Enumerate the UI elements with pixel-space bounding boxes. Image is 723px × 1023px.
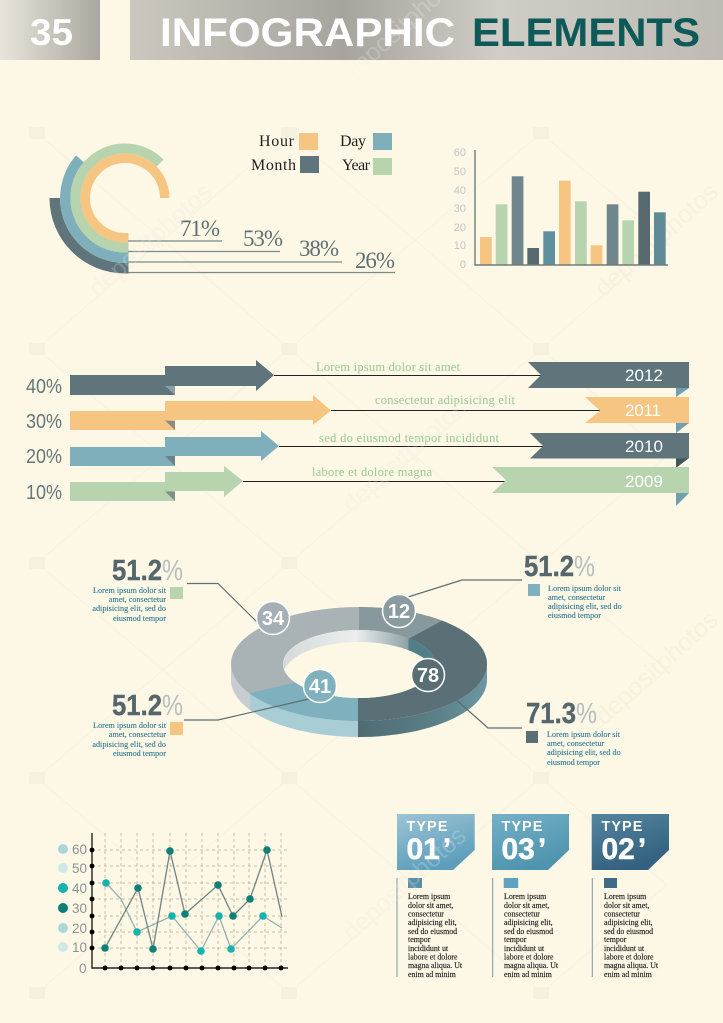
header: number tab: 35 xyxy=(30,12,73,53)
watermark lattice xyxy=(29,127,667,999)
callout: bottom left: amet, consectetur xyxy=(109,730,166,739)
type card 01: enim ad minim xyxy=(408,970,457,979)
callout: bottom left: eiusmod tempor xyxy=(113,749,166,758)
type card 02: tempor xyxy=(604,935,627,944)
axes xyxy=(475,150,668,265)
arrow 2010 xyxy=(70,431,279,466)
legend: Year xyxy=(342,157,371,174)
y labels: 40 xyxy=(72,881,87,896)
ribbon 2010: 2010 xyxy=(625,437,663,456)
percentage labels: 53% xyxy=(243,226,283,251)
row labels: percent: 40% xyxy=(26,376,62,398)
series light xyxy=(102,879,282,955)
watermark overlay xyxy=(83,0,472,946)
callout: top left xyxy=(92,555,183,623)
type card 03: magna aliqua. Ut xyxy=(504,961,559,970)
axis labels: 60 xyxy=(454,147,466,159)
percentage labels: 38% xyxy=(299,236,339,261)
ribbon 2009 xyxy=(492,467,689,506)
row labels: percent: 30% xyxy=(26,411,62,433)
watermark overlay: depositphotos xyxy=(83,177,218,302)
callout: bottom right: Lorem ipsum dolor sit xyxy=(547,730,621,739)
callout: top right: eiusmod tempor xyxy=(548,611,601,620)
type card 02: 02’ xyxy=(602,833,646,866)
type card 02: labore et dolore xyxy=(604,952,654,962)
donut side xyxy=(231,664,487,737)
3D donut chart xyxy=(184,580,522,740)
callout: top left: Lorem ipsum dolor sit xyxy=(93,586,167,595)
type card 02: adipisicing elit, xyxy=(604,918,653,927)
caption 3: sed do eiusmod tempor incididunt xyxy=(319,431,500,445)
watermark text: depositphotos xyxy=(589,605,723,730)
type card 03: incididunt ut xyxy=(504,944,545,953)
watermark overlay: depositphotos xyxy=(337,821,472,946)
callout: bottom right: adipisicing elit, sed do xyxy=(547,748,621,757)
type card 03: 03’ xyxy=(502,833,546,866)
ring: hour xyxy=(80,154,170,242)
marker 12 xyxy=(382,594,416,628)
callout: bottom left: Lorem ipsum dolor sit xyxy=(93,721,167,730)
y labels: 20 xyxy=(72,921,87,936)
legend: Day xyxy=(340,133,366,150)
marker 12: 12 xyxy=(388,601,410,623)
ring: year xyxy=(70,144,164,253)
callout: top right: 51.2 xyxy=(524,551,574,583)
type card 02: TYPE xyxy=(602,819,643,835)
percentage labels: 26% xyxy=(355,248,395,273)
type card 01: labore et dolore xyxy=(408,952,458,962)
callout: bottom left xyxy=(92,690,183,758)
callout: bottom right: amet, consectetur xyxy=(547,739,605,748)
watermark text: depositphotos xyxy=(337,821,472,946)
type card 01: sed do eiusmod xyxy=(408,927,457,936)
watermark text: depositphotos xyxy=(589,177,723,302)
type card 03: Lorem ipsum xyxy=(504,892,547,901)
callout: top left: adipisicing elit, sed do xyxy=(92,604,166,613)
series dark xyxy=(101,846,282,953)
marker 41 xyxy=(304,670,336,702)
axis labels: 40 xyxy=(454,185,466,197)
donut inner wall xyxy=(283,630,435,698)
donut top face xyxy=(231,607,487,721)
callout: bottom right xyxy=(526,698,621,767)
callout: top right xyxy=(524,551,622,620)
callout: top right: amet, consectetur xyxy=(548,593,606,602)
callout: bottom left: % xyxy=(162,690,183,722)
watermark text: depositphotos xyxy=(337,393,472,518)
type card 03: labore et dolore xyxy=(504,952,554,962)
type card 01: dolor sit amet, xyxy=(408,901,453,910)
ribbon 2012: 2012 xyxy=(625,366,663,385)
type card 01: incididunt ut xyxy=(408,944,449,953)
percentage labels xyxy=(180,216,395,273)
ribbon 2010 xyxy=(530,433,689,468)
type card 01: Lorem ipsum xyxy=(408,892,451,901)
marker 34: 34 xyxy=(262,608,285,630)
type card 03: sed do eiusmod xyxy=(504,927,553,936)
callout: bottom right: eiusmod tempor xyxy=(547,758,600,767)
axis labels xyxy=(454,147,466,271)
grid xyxy=(92,833,290,968)
type card 02: incididunt ut xyxy=(604,944,645,953)
watermark text: depositphotos xyxy=(83,177,218,302)
type card 02: dolor sit amet, xyxy=(604,901,649,910)
ribbon 2009: 2009 xyxy=(625,472,663,491)
type card 01: tempor xyxy=(408,935,431,944)
type card 01: magna aliqua. Ut xyxy=(408,961,463,970)
legend: Hour xyxy=(259,133,295,150)
marker 78 xyxy=(412,658,444,692)
axis labels: 30 xyxy=(454,203,466,215)
legend xyxy=(251,133,392,175)
ribbon 2011: 2011 xyxy=(625,401,661,420)
type card 01: TYPE xyxy=(406,819,448,835)
arrow 2009 xyxy=(70,466,243,501)
axis labels: 10 xyxy=(454,240,466,252)
type card 01: adipisicing elit, xyxy=(408,918,457,927)
axis labels: 0 xyxy=(460,259,466,271)
ribbon 2012 xyxy=(528,362,689,397)
callout: top right: % xyxy=(574,551,595,583)
radial bar chart xyxy=(50,144,395,274)
marker 34 xyxy=(256,602,290,634)
callout: top left: % xyxy=(162,555,183,587)
legend dots xyxy=(58,844,68,952)
axes xyxy=(92,833,288,968)
header: number tab xyxy=(0,0,100,60)
type card 01: consectetur xyxy=(408,910,444,918)
callout: top right: Lorem ipsum dolor sit xyxy=(548,584,622,593)
type card 03: dolor sit amet, xyxy=(504,901,549,910)
y labels: 10 xyxy=(72,940,87,955)
row labels: percent xyxy=(26,376,62,504)
y labels: 50 xyxy=(72,861,87,876)
callout: bottom left: 51.2 xyxy=(112,690,162,722)
type card 02: sed do eiusmod xyxy=(604,927,653,936)
type card 01 xyxy=(397,814,475,979)
ribbon 2011 xyxy=(585,397,689,433)
bars xyxy=(480,176,666,265)
marker 78: 78 xyxy=(417,665,439,687)
y labels: 0 xyxy=(79,961,87,976)
ring: day xyxy=(60,155,128,263)
arrow 2011 xyxy=(70,395,331,430)
header: title banner xyxy=(130,0,723,60)
axis labels: 50 xyxy=(454,166,466,178)
type card 03 xyxy=(492,814,569,979)
percentage labels: 71% xyxy=(180,216,220,241)
axis labels: 20 xyxy=(454,222,466,234)
arrow 2012 xyxy=(70,360,274,395)
callout: top left: 51.2 xyxy=(112,555,162,587)
arrow timeline xyxy=(70,360,689,506)
header: title banner: ELEMENTS xyxy=(472,11,700,55)
callout: bottom right: % xyxy=(576,698,597,730)
caption 2: consectetur adipisicing elit xyxy=(375,393,516,407)
callout: top left: eiusmod tempor xyxy=(113,614,166,623)
legend: Month xyxy=(251,157,296,174)
line chart xyxy=(58,833,290,976)
type card 02 xyxy=(592,814,669,979)
caption 4: labore et dolore magna xyxy=(312,465,432,479)
ring: month xyxy=(50,198,128,274)
connector lines xyxy=(184,580,522,728)
row labels: percent: 20% xyxy=(26,446,62,468)
y labels: 60 xyxy=(72,842,87,857)
connector lines xyxy=(243,376,600,482)
caption 1: Lorem ipsum dolor sit amet xyxy=(316,360,461,374)
bar chart xyxy=(454,147,668,271)
y labels xyxy=(72,842,87,976)
header: title banner: INFOGRAPHIC xyxy=(160,11,455,55)
callout: bottom right: 71.3 xyxy=(526,698,576,730)
watermark text xyxy=(83,177,723,946)
type card 03: consectetur xyxy=(504,910,540,918)
type card 03: adipisicing elit, xyxy=(504,918,553,927)
type card 02: consectetur xyxy=(604,910,640,918)
y labels: 30 xyxy=(72,901,87,916)
row labels: percent: 10% xyxy=(26,482,62,504)
type card 03: enim ad minim xyxy=(504,970,553,979)
axis dots xyxy=(90,848,283,970)
marker 41: 41 xyxy=(309,676,331,698)
callout: bottom left: adipisicing elit, sed do xyxy=(92,740,166,749)
type card 02: Lorem ipsum xyxy=(604,892,647,901)
type card 02: magna aliqua. Ut xyxy=(604,961,659,970)
type card 03: tempor xyxy=(504,935,527,944)
type card 03: TYPE xyxy=(502,819,543,835)
type card 02: enim ad minim xyxy=(604,970,653,979)
type card 01: 01’ xyxy=(406,833,451,866)
callout: top left: amet, consectetur xyxy=(109,595,166,604)
watermark overlay: depositphotos xyxy=(337,393,472,518)
leader lines xyxy=(128,241,395,272)
callout: top right: adipisicing elit, sed do xyxy=(548,602,622,611)
